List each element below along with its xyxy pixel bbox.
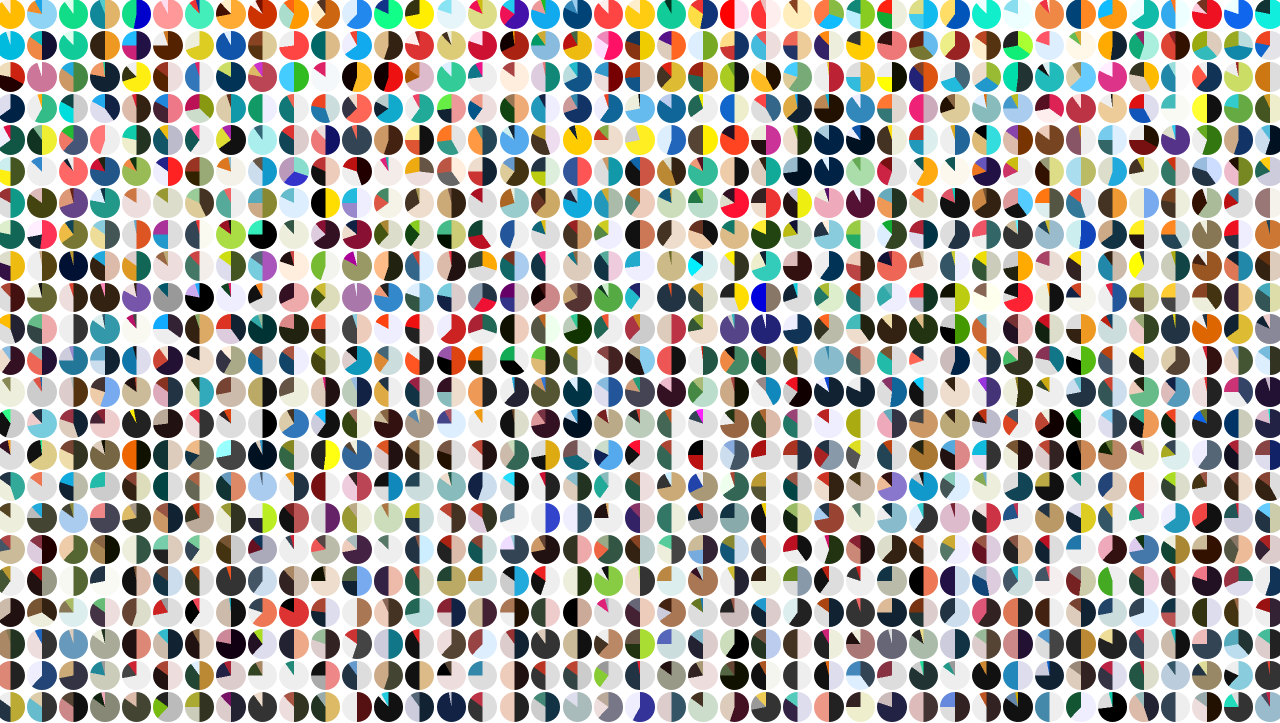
- pie row 1: [0, 0, 1280, 29]
- pie row 9: [0, 251, 1280, 281]
- pie row 23: [0, 692, 1280, 722]
- pie row 6: [0, 157, 1280, 186]
- pie row 19: [0, 566, 1280, 596]
- pie row 8: [0, 220, 1280, 249]
- pie row 16: [0, 472, 1280, 501]
- pie row 11: [0, 314, 1280, 344]
- pie row 14: [0, 409, 1280, 438]
- pie row 15: [0, 440, 1280, 470]
- pie row 5: [0, 125, 1280, 155]
- pie row 12: [0, 346, 1280, 375]
- pie row 22: [0, 661, 1280, 690]
- pie row 20: [0, 598, 1280, 627]
- pie row 4: [0, 94, 1280, 123]
- pie row 21: [0, 629, 1280, 659]
- pie row 17: [0, 503, 1280, 533]
- pie row 18: [0, 535, 1280, 564]
- pie row 3: [0, 62, 1280, 92]
- pie row 7: [0, 188, 1280, 218]
- pie row 2: [0, 31, 1280, 60]
- pie row 10: [0, 283, 1280, 312]
- pie row 13: [0, 377, 1280, 407]
